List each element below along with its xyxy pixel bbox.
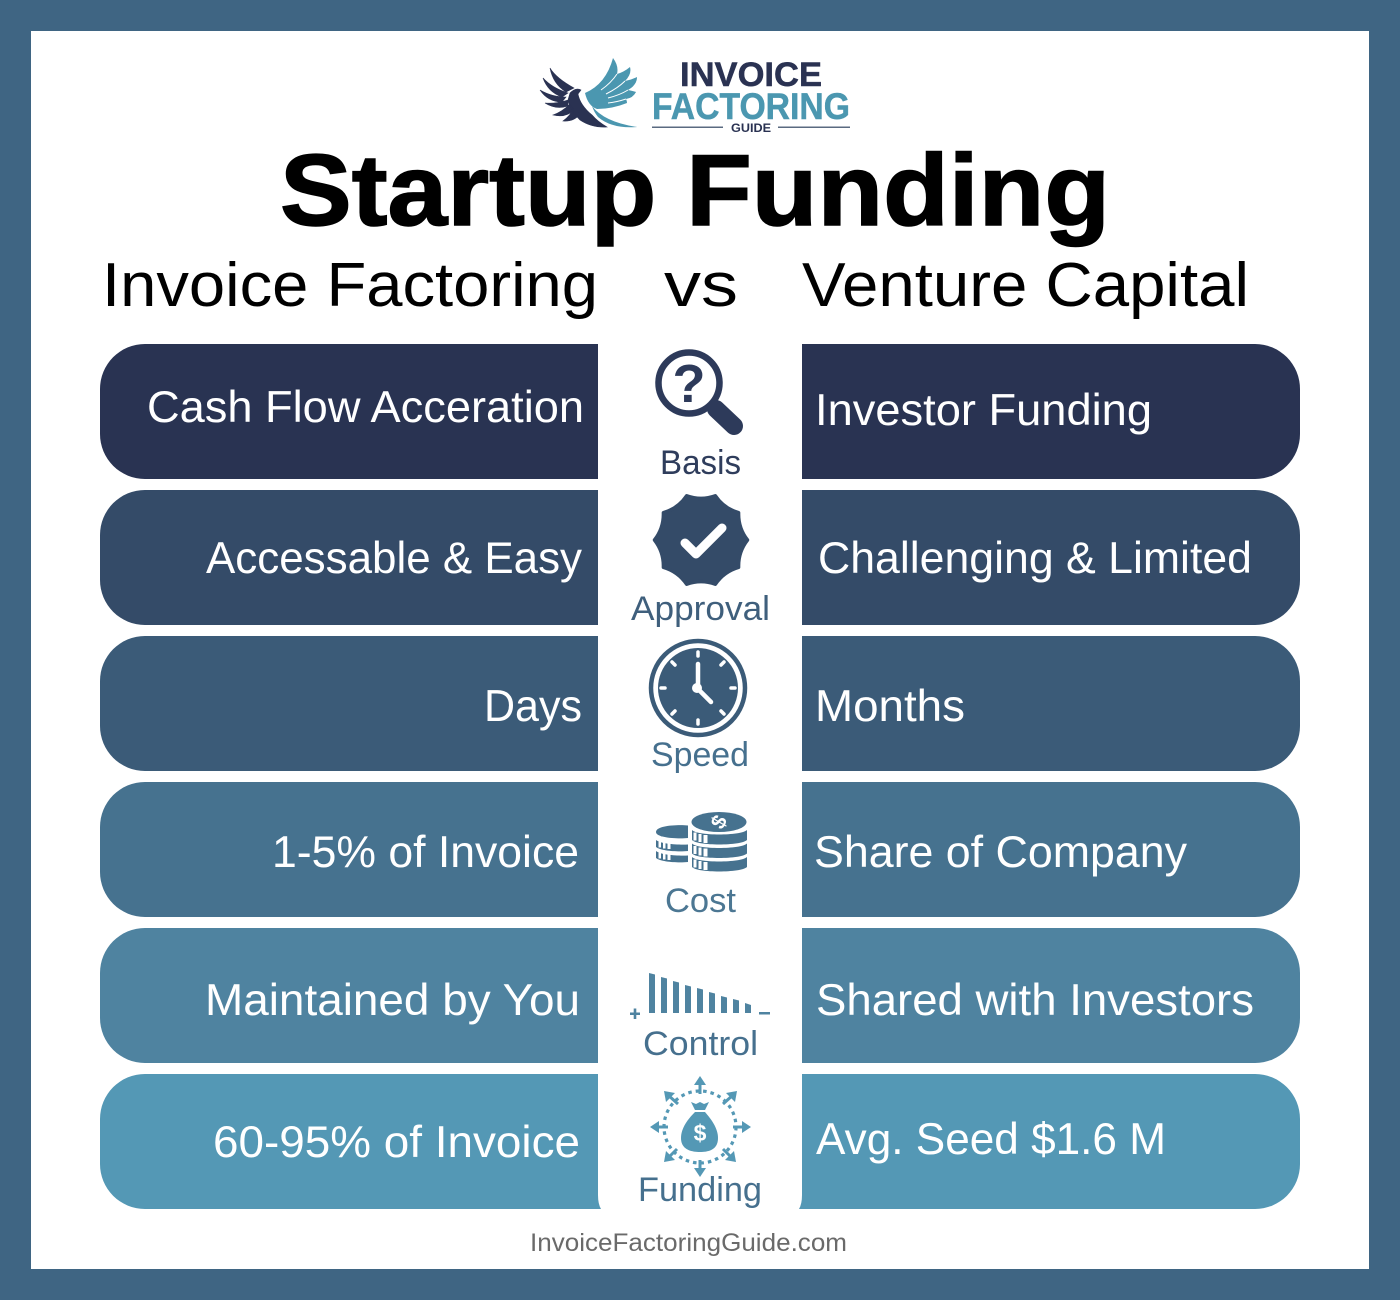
- icon: magnifier with question mark: [658, 352, 735, 427]
- title: Startup Funding: [280, 135, 1110, 247]
- icon: coin stacks: [656, 811, 747, 872]
- subheading: invoice factoring: Invoice Factoring: [102, 251, 598, 320]
- subheading: venture capital: Venture Capital: [802, 251, 1249, 320]
- icon: magnifier with question mark: ?: [672, 354, 706, 414]
- row: approval, invoice factoring: [100, 490, 598, 625]
- row: basis, venture capital: Investor Funding: [815, 386, 1152, 435]
- row: basis, venture capital: [802, 344, 1300, 479]
- row: control, invoice factoring: [100, 928, 598, 1063]
- icon: control scale: [630, 973, 770, 1019]
- logo: [540, 56, 850, 135]
- row: funding, venture capital: Avg. Seed $1.6 M: [816, 1115, 1166, 1164]
- icon: money bag with radiating arrows: $: [694, 1120, 707, 1146]
- label: cost: Cost: [665, 882, 737, 920]
- row: cost, venture capital: Share of Company: [814, 828, 1188, 877]
- row: speed, invoice factoring: Days: [484, 682, 582, 731]
- row: basis, invoice factoring: Cash Flow Acceration: [147, 383, 584, 432]
- row: control, invoice factoring: Maintained by You: [205, 976, 580, 1025]
- row: approval, venture capital: Challenging & Limited: [818, 534, 1252, 583]
- logo bird: dark wing and body: [540, 68, 607, 127]
- label: approval: Approval: [631, 590, 770, 628]
- icon: clock: [651, 641, 745, 735]
- row: cost, venture capital: [802, 782, 1300, 917]
- logo wordmark: guide: GUIDE: [731, 121, 771, 135]
- row: cost, invoice factoring: 1-5% of Invoice: [272, 828, 579, 877]
- icon: money bag with radiating arrows: [650, 1076, 751, 1177]
- row: basis, invoice factoring: [100, 344, 598, 479]
- label: basis: Basis: [660, 444, 741, 482]
- logo wordmark: invoice: INVOICE: [680, 56, 822, 94]
- row: speed, invoice factoring: [100, 636, 598, 771]
- label: speed: Speed: [651, 736, 749, 774]
- row: funding, venture capital: [799, 1074, 1300, 1209]
- row: control, venture capital: [802, 928, 1300, 1063]
- footer url: InvoiceFactoringGuide.com: [530, 1229, 847, 1257]
- row: speed, venture capital: Months: [815, 682, 965, 731]
- icon: coin stacks: $: [707, 811, 732, 833]
- row: funding, invoice factoring: 60-95% of Invoice: [213, 1118, 580, 1167]
- label: funding: Funding: [638, 1171, 762, 1209]
- icon: approval badge: [654, 496, 748, 584]
- row: cost, invoice factoring: [100, 782, 598, 917]
- row: funding, invoice factoring: [100, 1074, 601, 1209]
- logo bird: teal wing: [585, 58, 637, 127]
- logo wordmark: factoring: FACTORING: [652, 86, 850, 127]
- row: speed, venture capital: [802, 636, 1300, 771]
- row: approval, venture capital: [802, 490, 1300, 625]
- row: approval, invoice factoring: Accessable & Easy: [206, 534, 583, 583]
- label: control: Control: [643, 1025, 758, 1063]
- subheading: vs: vs: [664, 251, 738, 320]
- row: control, venture capital: Shared with Investors: [816, 976, 1254, 1025]
